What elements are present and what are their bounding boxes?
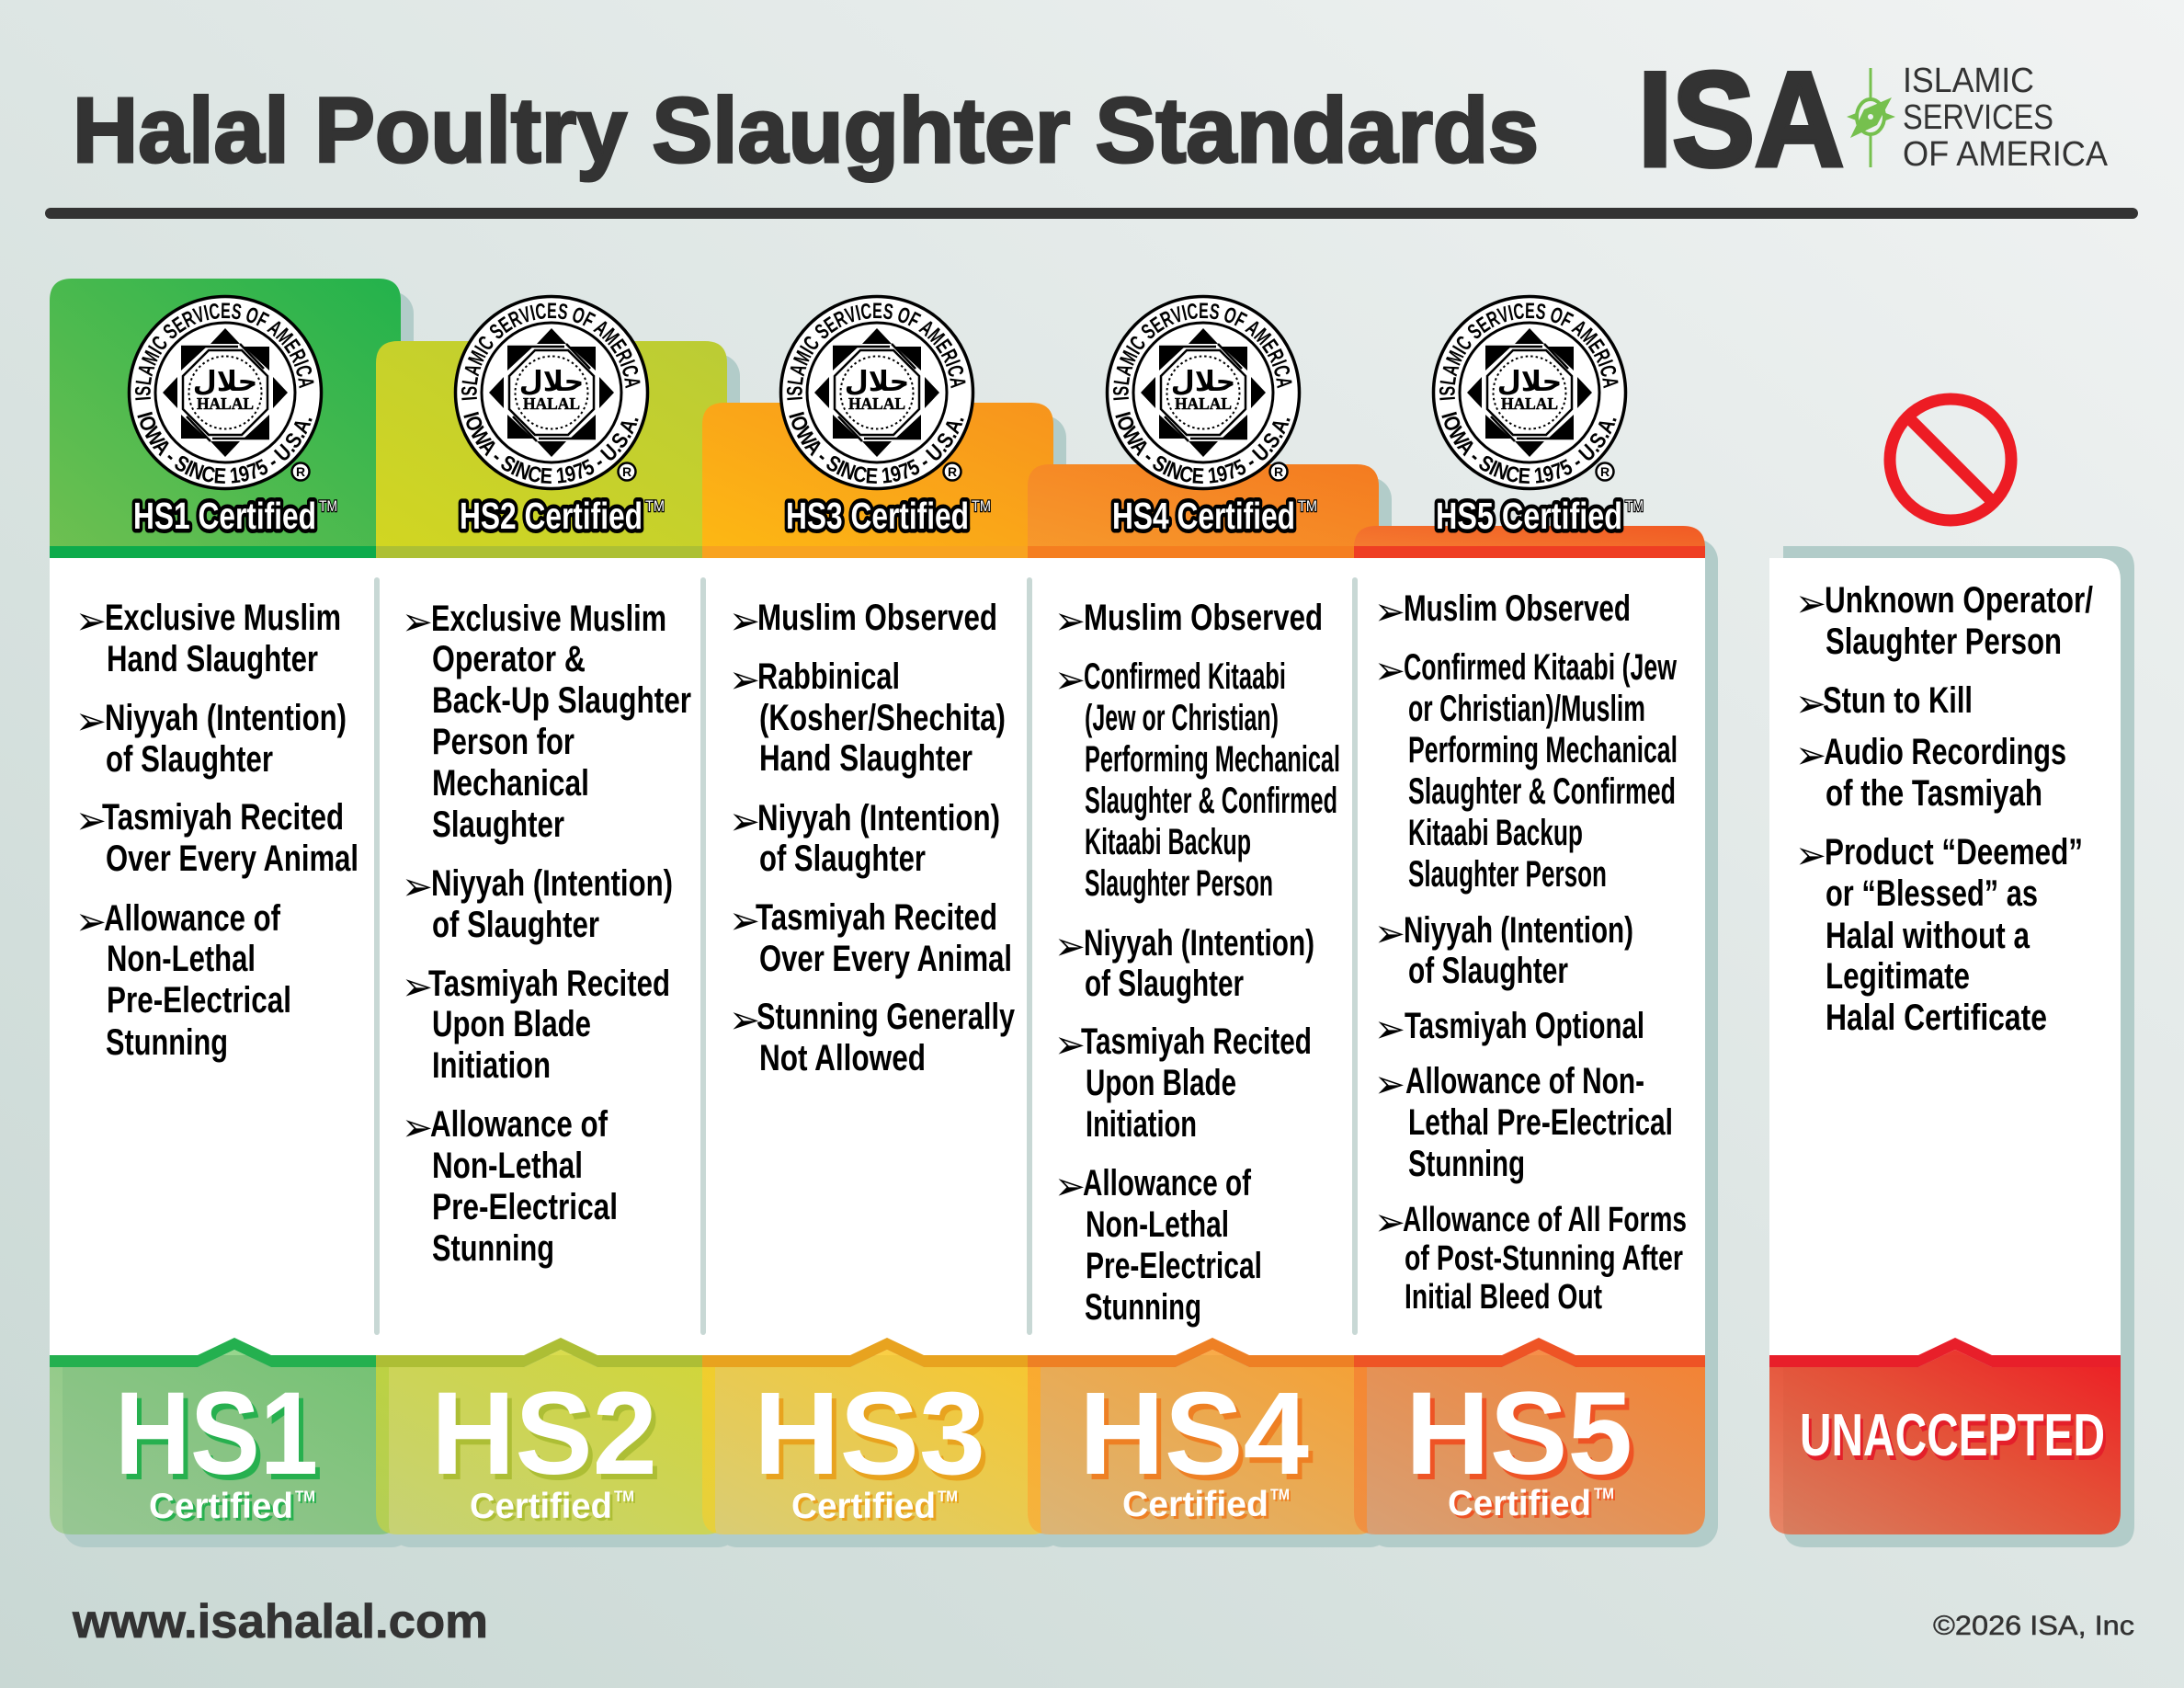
- seal: HS1: HALAL: [197, 394, 254, 413]
- list: HS5 standards: of Slaughter: [1408, 951, 1568, 991]
- list: HS3 standards: Stunning Generally: [756, 997, 1016, 1037]
- badge: HS5 Certified: Certified: [1450, 1487, 1594, 1526]
- list: HS4 standards: Initiation: [1086, 1104, 1197, 1145]
- list: HS4 standards: ➢: [1054, 656, 1086, 702]
- list: HS1 standards: Niyyah (Intention): [105, 698, 347, 738]
- list: HS4 standards: Confirmed Kitaabi: [1084, 656, 1286, 697]
- list: HS2 standards: Initiation: [432, 1045, 551, 1086]
- list: HS1 standards: of Slaughter: [106, 739, 273, 780]
- list: HS4 standards: (Jew or Christian): [1085, 698, 1279, 738]
- list: HS5 standards: [1374, 588, 1687, 1317]
- list: HS2 standards: Back-Up Slaughter: [432, 680, 691, 721]
- seal: HS3: ISLAMIC SERVICES OF AMERICA: [787, 303, 965, 401]
- seal: HS5: HALAL: [1501, 394, 1558, 413]
- list: HS5 standards: ➢: [1374, 1006, 1405, 1052]
- list: HS4 standards: Muslim Observed: [1084, 598, 1323, 638]
- list: HS1 standards: ➢: [75, 798, 107, 842]
- list: HS2 standards: ➢: [402, 599, 433, 644]
- label: HS5 Certified: TM: [1625, 497, 1644, 515]
- list: unaccepted practices: Legitimate: [1826, 956, 1970, 997]
- list: HS5 standards: Initial Bleed Out: [1405, 1278, 1602, 1317]
- badge: HS1 Certified: HS1: [119, 1374, 323, 1505]
- seal: HS1: ISLAMIC SERVICES OF AMERICA: [134, 303, 314, 401]
- list: HS5 standards: or Christian)/Muslim: [1408, 689, 1645, 729]
- seal: HS3: R: [948, 464, 957, 479]
- badge: HS5 Certified: HS5: [1405, 1368, 1632, 1500]
- list: HS4 standards: Slaughter Person: [1085, 863, 1273, 904]
- list: HS1 standards: Exclusive Muslim: [105, 598, 341, 638]
- badge: HS5 Certified: Certified: [1448, 1484, 1591, 1523]
- badge: HS4 Certified: TM: [1270, 1486, 1290, 1503]
- seal: HS1: حلال: [193, 366, 257, 398]
- list: HS5 standards: Performing Mechanical: [1408, 730, 1678, 770]
- panel: HS5: [1354, 526, 1718, 1547]
- list: HS3 standards: Muslim Observed: [757, 598, 997, 638]
- list: HS1 standards: ➢: [75, 699, 107, 743]
- badge: HS3 Certified: Certified: [794, 1489, 938, 1529]
- panel: HS4: [1028, 464, 1392, 1547]
- list: unaccepted practices: or “Blessed” as: [1826, 873, 2038, 914]
- badge: HS3 Certified: HS3: [754, 1368, 985, 1500]
- seal: HS5: [1432, 294, 1627, 491]
- badge: HS1 Certified: TM: [297, 1489, 317, 1507]
- seal: HS2: [454, 294, 649, 491]
- list: HS1 standards: Pre-Electrical: [107, 980, 291, 1021]
- list: HS2 standards: Non-Lethal: [432, 1146, 583, 1186]
- title: Halal Poultry Slaughter Standards: [73, 79, 1539, 182]
- list: HS5 standards: Muslim Observed: [1404, 588, 1631, 629]
- list: HS3 standards: ➢: [729, 598, 760, 644]
- list: HS2 standards: Upon Blade: [432, 1004, 591, 1044]
- list: HS4 standards: Niyyah (Intention): [1084, 923, 1314, 964]
- list: HS1 standards: ➢: [75, 598, 107, 644]
- seal: HS5: حلال: [1497, 366, 1562, 398]
- seal: HS5: IOWA - SINCE 1975 - U.S.A.: [1441, 412, 1617, 484]
- seal: HS5: ISLAMIC SERVICES OF AMERICA: [1439, 303, 1618, 401]
- list: HS4 standards: of Slaughter: [1085, 964, 1244, 1004]
- list: HS5 standards: ➢: [1374, 588, 1405, 634]
- list: HS1 standards: Allowance of: [104, 898, 281, 939]
- footer: website: www.isahalal.com: [72, 1595, 488, 1648]
- badge: HS4 Certified: Certified: [1122, 1485, 1268, 1524]
- list: HS2 standards: ➢: [402, 864, 433, 908]
- list: HS5 standards: Allowance of Non-: [1405, 1061, 1644, 1101]
- panel: HS3: [702, 403, 1066, 1547]
- list: HS5 standards: Kitaabi Backup: [1408, 813, 1583, 853]
- panel: unaccepted: [1769, 546, 2134, 1547]
- panel: HS1: [50, 279, 414, 1547]
- seal: HS3: [779, 294, 974, 491]
- list: unaccepted practices: Halal without a: [1826, 916, 2030, 956]
- label: HS3 Certified: TM: [972, 497, 991, 515]
- list: HS4 standards: Performing Mechanical: [1085, 739, 1340, 780]
- list: unaccepted practices: of the Tasmiyah: [1826, 773, 2042, 814]
- list: unaccepted practices: [1795, 580, 2093, 1038]
- list: HS2 standards: Pre-Electrical: [432, 1187, 618, 1227]
- list: HS1 standards: [75, 598, 358, 1063]
- seal: HS3: IOWA - SINCE 1975 - U.S.A.: [789, 412, 964, 484]
- seal: HS3: HALAL: [848, 394, 905, 413]
- list: unaccepted practices: ➢: [1795, 732, 1826, 778]
- badge: HS1 Certified: TM: [295, 1488, 315, 1505]
- list: HS3 standards: ➢: [729, 798, 760, 844]
- list: HS5 standards: Confirmed Kitaabi (Jew: [1404, 647, 1678, 688]
- list: unaccepted practices: Halal Certificate: [1826, 998, 2047, 1038]
- list: unaccepted practices: Audio Recordings: [1824, 732, 2066, 772]
- list: HS1 standards: Over Every Animal: [106, 838, 358, 879]
- list: HS5 standards: Tasmiyah Optional: [1405, 1006, 1644, 1046]
- label: HS5 Certified: HS5 Certified: [1436, 495, 1622, 537]
- list: HS3 standards: ➢: [729, 997, 760, 1043]
- badge: HS5 Certified: HS5: [1410, 1374, 1637, 1505]
- list: HS5 standards: Lethal Pre-Electrical: [1408, 1102, 1673, 1143]
- list: HS4 standards: Slaughter & Confirmed: [1085, 781, 1337, 821]
- list: HS3 standards: Niyyah (Intention): [757, 798, 1000, 838]
- list: HS4 standards: Non-Lethal: [1086, 1204, 1229, 1245]
- seal: HS1: R: [296, 464, 305, 479]
- list: HS2 standards: Person for: [432, 722, 574, 762]
- seal: HS3: حلال: [845, 366, 909, 398]
- list: unaccepted practices: ➢: [1795, 680, 1826, 726]
- list: HS1 standards: Hand Slaughter: [107, 639, 318, 679]
- seal: HS2: R: [622, 464, 631, 479]
- badge: HS4 Certified: HS4: [1084, 1374, 1314, 1505]
- list: HS5 standards: Stunning: [1408, 1144, 1525, 1184]
- list: HS3 standards: Tasmiyah Recited: [756, 897, 997, 938]
- logo: ISA: ISLAMIC: [1903, 62, 2034, 100]
- badge: HS2 Certified: Certified: [470, 1487, 612, 1526]
- seal: HS4: HALAL: [1175, 394, 1232, 413]
- badge: HS3 Certified: TM: [939, 1489, 960, 1507]
- list: HS2 standards: Slaughter: [432, 804, 564, 845]
- badge: HS1 Certified: HS1: [115, 1368, 318, 1500]
- list: HS2 standards: Tasmiyah Recited: [428, 964, 670, 1004]
- seal: HS2: حلال: [519, 366, 584, 398]
- list: HS3 standards: of Slaughter: [759, 838, 926, 879]
- list: HS5 standards: of Post-Stunning After: [1405, 1239, 1683, 1278]
- logo: ISA: OF AMERICA: [1903, 135, 2109, 174]
- badge: HS1 Certified: Certified: [149, 1487, 293, 1526]
- list: HS5 standards: ➢: [1374, 647, 1405, 693]
- badge: HS2 Certified: TM: [614, 1488, 634, 1505]
- list: unaccepted practices: Product “Deemed”: [1825, 832, 2083, 873]
- badge: HS5 Certified: TM: [1594, 1485, 1614, 1502]
- list: unaccepted practices: Stun to Kill: [1823, 680, 1973, 721]
- list: HS3 standards: Not Allowed: [759, 1038, 926, 1078]
- list: HS5 standards: ➢: [1374, 910, 1405, 956]
- badge: HS5 Certified: TM: [1596, 1487, 1616, 1504]
- list: unaccepted practices: Unknown Operator/: [1825, 580, 2093, 621]
- logo: ISA: [1638, 44, 2109, 194]
- list: unaccepted practices: ➢: [1795, 581, 1826, 625]
- list: HS2 standards: Mechanical: [432, 763, 589, 804]
- list: HS4 standards: ➢: [1054, 1164, 1086, 1208]
- list: HS5 standards: ➢: [1374, 1061, 1405, 1107]
- icon: prohibited sign: [1890, 399, 2011, 520]
- list: HS1 standards: Stunning: [106, 1022, 228, 1063]
- seal: HS1: IOWA - SINCE 1975 - U.S.A.: [137, 412, 313, 484]
- list: HS1 standards: Non-Lethal: [107, 939, 256, 979]
- badge: HS2 Certified: HS2: [436, 1374, 662, 1505]
- seal: HS4: [1105, 294, 1302, 491]
- seal: HS4: IOWA - SINCE 1975 - U.S.A.: [1115, 412, 1291, 484]
- list: HS2 standards: of Slaughter: [432, 905, 599, 945]
- label: HS1 Certified: TM: [319, 497, 337, 515]
- seal: HS2: IOWA - SINCE 1975 - U.S.A.: [463, 412, 639, 484]
- list: HS5 standards: Slaughter & Confirmed: [1408, 771, 1676, 812]
- list: HS4 standards: Allowance of: [1083, 1163, 1252, 1203]
- list: HS4 standards: Upon Blade: [1086, 1063, 1236, 1103]
- badge: HS2 Certified: TM: [616, 1489, 636, 1507]
- list: HS4 standards: Stunning: [1085, 1287, 1201, 1328]
- list: unaccepted practices: ➢: [1795, 833, 1826, 877]
- list: HS3 standards: [729, 598, 1016, 1078]
- list: unaccepted practices: Slaughter Person: [1826, 622, 2062, 662]
- badge: HS2 Certified: HS2: [431, 1368, 657, 1500]
- list: HS4 standards: Tasmiyah Recited: [1081, 1021, 1312, 1062]
- logo: ISA: ISA: [1638, 44, 1844, 194]
- list: HS2 standards: Exclusive Muslim: [431, 599, 666, 639]
- seal: HS4: حلال: [1171, 366, 1235, 398]
- badge: HS3 Certified: Certified: [791, 1487, 936, 1526]
- list: HS3 standards: Hand Slaughter: [759, 738, 973, 779]
- list: HS4 standards: Pre-Electrical: [1086, 1246, 1262, 1286]
- badge: HS2 Certified: Certified: [472, 1489, 615, 1529]
- footer: copyright: ©2026 ISA, Inc: [1933, 1611, 2134, 1641]
- label: HS4 Certified: HS4 Certified: [1112, 495, 1295, 537]
- list: HS4 standards: ➢: [1054, 923, 1086, 969]
- list: HS2 standards: Operator &: [432, 639, 586, 679]
- badge: HS1 Certified: Certified: [152, 1489, 296, 1529]
- list: HS2 standards: ➢: [402, 1105, 433, 1149]
- badge: HS3 Certified: TM: [938, 1488, 958, 1505]
- list: HS2 standards: Stunning: [432, 1228, 554, 1269]
- list: HS2 standards: Allowance of: [430, 1104, 609, 1145]
- list: HS2 standards: [402, 599, 691, 1269]
- list: HS2 standards: ➢: [402, 964, 433, 1009]
- list: HS3 standards: ➢: [729, 656, 760, 702]
- label: HS2 Certified: HS2 Certified: [460, 495, 643, 537]
- label: HS2 Certified: TM: [645, 497, 665, 515]
- list: HS5 standards: Allowance of All Forms: [1403, 1201, 1687, 1239]
- list: HS5 standards: Niyyah (Intention): [1404, 910, 1633, 951]
- seal: HS2: ISLAMIC SERVICES OF AMERICA: [461, 303, 640, 401]
- list: HS4 standards: ➢: [1054, 1022, 1086, 1066]
- seal: HS4: ISLAMIC SERVICES OF AMERICA: [1112, 303, 1292, 401]
- list: HS4 standards: Kitaabi Backup: [1085, 822, 1251, 862]
- badge: HS4 Certified: HS4: [1079, 1368, 1309, 1500]
- list: HS1 standards: ➢: [75, 899, 107, 943]
- list: HS2 standards: Niyyah (Intention): [431, 863, 673, 904]
- header rule: [45, 208, 2138, 219]
- badge: HS4 Certified: Certified: [1125, 1488, 1271, 1527]
- label: HS3 Certified: HS3 Certified: [786, 495, 969, 537]
- badge: HS4 Certified: TM: [1272, 1488, 1291, 1505]
- seal: HS5: R: [1600, 464, 1610, 479]
- panel: HS2: [376, 341, 740, 1547]
- list: HS3 standards: Rabbinical: [757, 656, 900, 697]
- badge: HS3 Certified: HS3: [758, 1374, 990, 1505]
- list: HS5 standards: Slaughter Person: [1408, 854, 1607, 895]
- list: HS3 standards: Over Every Animal: [759, 939, 1012, 979]
- logo: ISA: SERVICES: [1903, 98, 2053, 137]
- label: HS1 Certified: HS1 Certified: [133, 495, 316, 537]
- list: HS3 standards: (Kosher/Shechita): [759, 698, 1006, 738]
- list: HS3 standards: ➢: [729, 897, 760, 943]
- list: HS1 standards: Tasmiyah Recited: [102, 797, 344, 838]
- list: HS4 standards: ➢: [1054, 598, 1086, 644]
- seal: HS4: R: [1274, 464, 1283, 479]
- seal: HS2: HALAL: [523, 394, 580, 413]
- label: HS4 Certified: TM: [1298, 497, 1317, 515]
- list: HS4 standards: [1054, 598, 1340, 1328]
- list: HS5 standards: ➢: [1374, 1199, 1405, 1245]
- seal: HS1: [127, 294, 324, 491]
